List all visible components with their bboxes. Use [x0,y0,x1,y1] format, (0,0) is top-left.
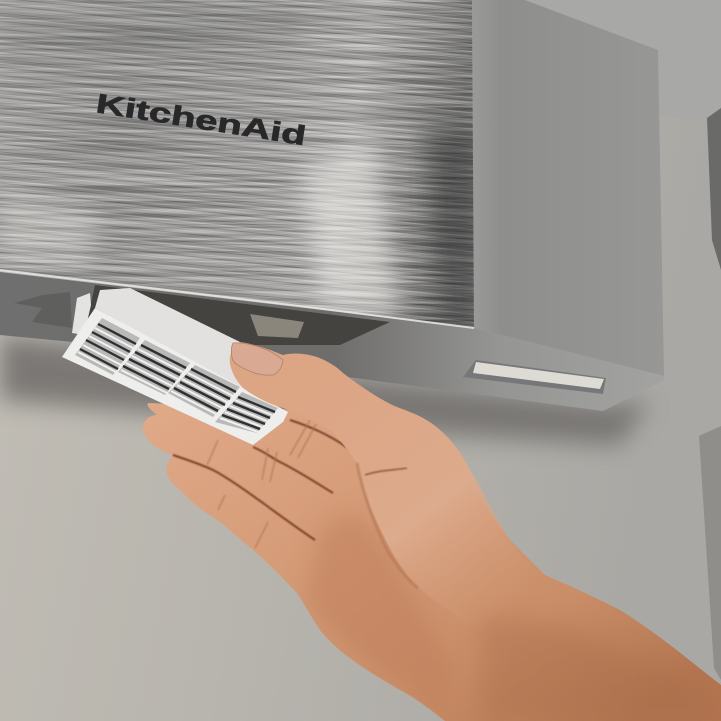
dark slots [80,324,275,429]
bright reflection [0,0,480,330]
logo: KitchenAid [94,88,308,151]
wrist shading [480,619,608,713]
thumb [230,342,545,630]
thumb base shade [357,463,418,588]
brushed texture [0,0,474,326]
palm shading [308,516,446,694]
ceiling [525,0,721,122]
filter front face [62,308,288,445]
filter clip tab [72,293,91,335]
fingers and palm [143,403,721,721]
air filter [62,288,288,445]
housing side face [472,0,664,376]
wall shadow [0,335,650,445]
vent slot [463,360,606,394]
filter grille sections [75,318,278,433]
white louvres [78,328,272,432]
knuckle creases [207,420,316,548]
thumb crease [365,468,407,475]
thumbnail [231,343,283,375]
stainless steel panel [0,0,474,328]
dark recess and hardware [14,285,390,345]
finger gaps [173,420,348,540]
housing bottom chamfer [0,272,665,411]
filter top face [95,288,244,390]
right side trim top [707,108,721,270]
right side trim bottom [699,426,721,680]
panel lower edge [0,270,474,328]
